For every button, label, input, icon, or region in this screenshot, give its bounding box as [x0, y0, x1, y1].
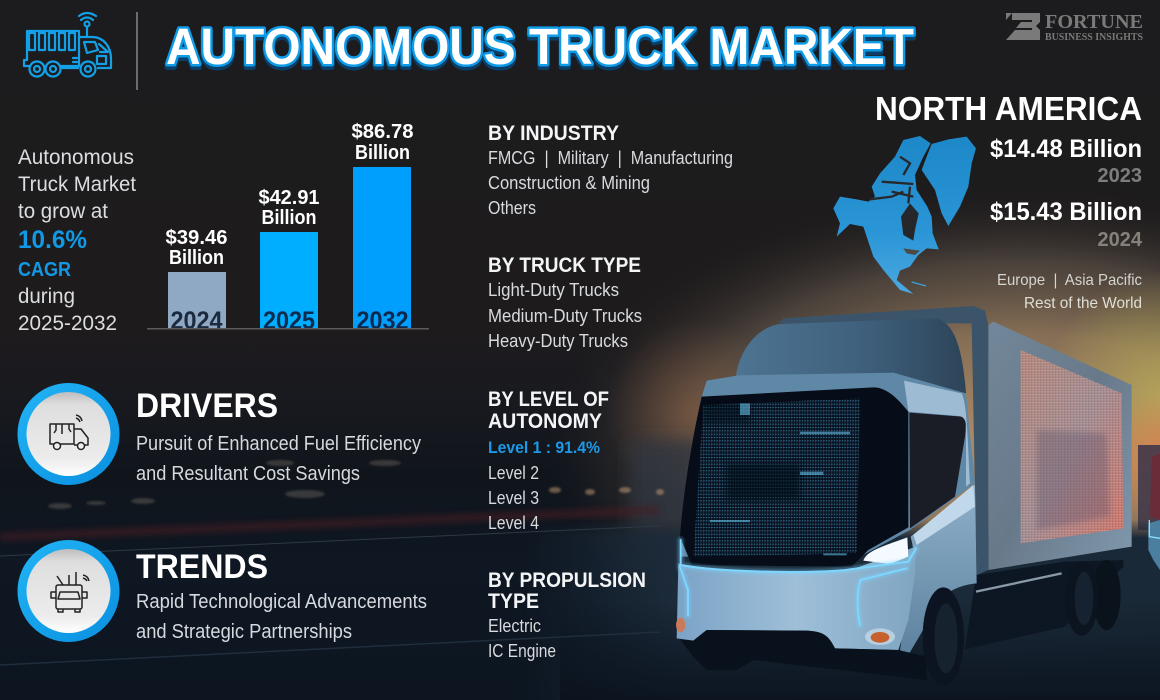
bar 2032: Billion — [355, 141, 410, 164]
segment: by propulsion type: Electric — [488, 616, 541, 636]
drivers text: DRIVERS — [136, 387, 278, 425]
segment: by level of autonomy: Level 2 — [488, 463, 539, 483]
segment: by industry: Construction & Mining — [488, 173, 650, 193]
drivers text: and Resultant Cost Savings — [136, 463, 360, 485]
drivers icon — [18, 383, 120, 485]
bar 2024 — [166, 226, 228, 335]
region: north america heading: NORTH AMERICA — [875, 90, 1142, 127]
cab upper — [680, 373, 975, 557]
door light stripe — [913, 485, 975, 545]
title: AUTONOMOUS TRUCK MARKET — [166, 18, 914, 75]
CAGR text block: 10.6% — [18, 226, 87, 254]
drivers text — [136, 387, 421, 485]
neon light lines — [680, 540, 916, 625]
front wheel — [923, 587, 964, 686]
bar 2032: $86.78 — [352, 120, 414, 143]
segment: by level of autonomy: BY LEVEL OF — [488, 388, 609, 411]
cargo box — [988, 322, 1132, 570]
segment: by truck type: BY TRUCK TYPE — [488, 254, 641, 277]
segment: by level of autonomy: Level 4 — [488, 513, 539, 533]
box front — [778, 306, 988, 575]
region values: Rest of the World — [1024, 295, 1142, 312]
header divider — [136, 12, 138, 90]
bar 2025: $42.91 — [258, 186, 320, 209]
background — [0, 212, 1160, 700]
segment: by level of autonomy — [488, 388, 609, 533]
segment: by industry: FMCG | Military | Manufacturing — [488, 148, 733, 168]
windshield — [680, 387, 908, 567]
region values: Europe | Asia Pacific — [997, 272, 1142, 289]
region values: $15.43 Billion — [990, 198, 1142, 226]
trends text: TRENDS — [136, 548, 268, 586]
logo — [1006, 11, 1143, 43]
bar 2024: $39.46 — [166, 226, 228, 249]
bar 2032 — [352, 120, 414, 335]
segment: by truck type — [488, 254, 642, 351]
trends text: and Strategic Partnerships — [136, 621, 352, 643]
segment: by level of autonomy: Level 1 : 91.4% — [488, 438, 600, 457]
region values: 2023 — [1098, 165, 1142, 187]
segment: by truck type: Medium-Duty Trucks — [488, 306, 642, 326]
trends text — [136, 548, 427, 643]
segment: by level of autonomy: AUTONOMY — [488, 410, 602, 433]
segment: by propulsion type: TYPE — [488, 590, 539, 613]
CAGR text block: CAGR — [18, 259, 71, 281]
segment: by propulsion type — [488, 569, 646, 661]
bar chart — [147, 120, 429, 335]
side window — [909, 413, 966, 528]
bar 2032: 2032 — [356, 307, 408, 335]
bar 2025: 2025 — [263, 307, 315, 335]
region values: 2024 — [1098, 229, 1143, 251]
fog lamps — [676, 618, 895, 645]
segment: by truck type: Heavy-Duty Trucks — [488, 331, 628, 351]
chassis — [965, 560, 1123, 649]
drivers text: Pursuit of Enhanced Fuel Efficiency — [136, 433, 421, 455]
CAGR text block: 2025-2032 — [18, 312, 117, 335]
map: north america — [833, 136, 976, 294]
header icon: connected truck — [24, 13, 111, 76]
door — [900, 485, 977, 655]
title: AUTONOMOUS TRUCK MARKET — [166, 21, 914, 78]
segment: by level of autonomy: Level 3 — [488, 488, 539, 508]
segment: by industry: Others — [488, 198, 536, 218]
logo: BUSINESS INSIGHTS — [1045, 32, 1143, 43]
pillar — [904, 381, 970, 487]
bar 2025 — [258, 186, 320, 335]
trends icon — [18, 540, 120, 642]
segment: by propulsion type: BY PROPULSION — [488, 569, 646, 592]
CAGR text block: to grow at — [18, 200, 108, 223]
logo: FORTUNE — [1045, 11, 1143, 33]
roof fairing — [736, 318, 966, 393]
region values — [990, 135, 1143, 312]
bar 2024: 2024 — [170, 307, 223, 335]
bar 2025: Billion — [262, 206, 316, 229]
segment: by propulsion type: IC Engine — [488, 641, 556, 661]
CAGR text block: during — [18, 285, 75, 308]
region values: $14.48 Billion — [990, 135, 1142, 163]
bumper — [677, 547, 916, 650]
CAGR text block: Autonomous — [18, 146, 134, 169]
headlight — [863, 537, 908, 564]
segment: by industry — [488, 122, 733, 218]
cargo display panel — [1021, 350, 1123, 543]
trends text: Rapid Technological Advancements — [136, 591, 427, 613]
truck photo — [676, 306, 1160, 686]
second truck at right edge — [1148, 453, 1160, 570]
front underbody — [680, 630, 927, 680]
segment: by truck type: Light-Duty Trucks — [488, 280, 619, 300]
bar 2024: Billion — [169, 246, 224, 269]
CAGR text block — [18, 146, 136, 335]
CAGR text block: Truck Market — [18, 173, 136, 196]
rear wheels — [1065, 560, 1121, 636]
segment: by industry: BY INDUSTRY — [488, 122, 619, 145]
